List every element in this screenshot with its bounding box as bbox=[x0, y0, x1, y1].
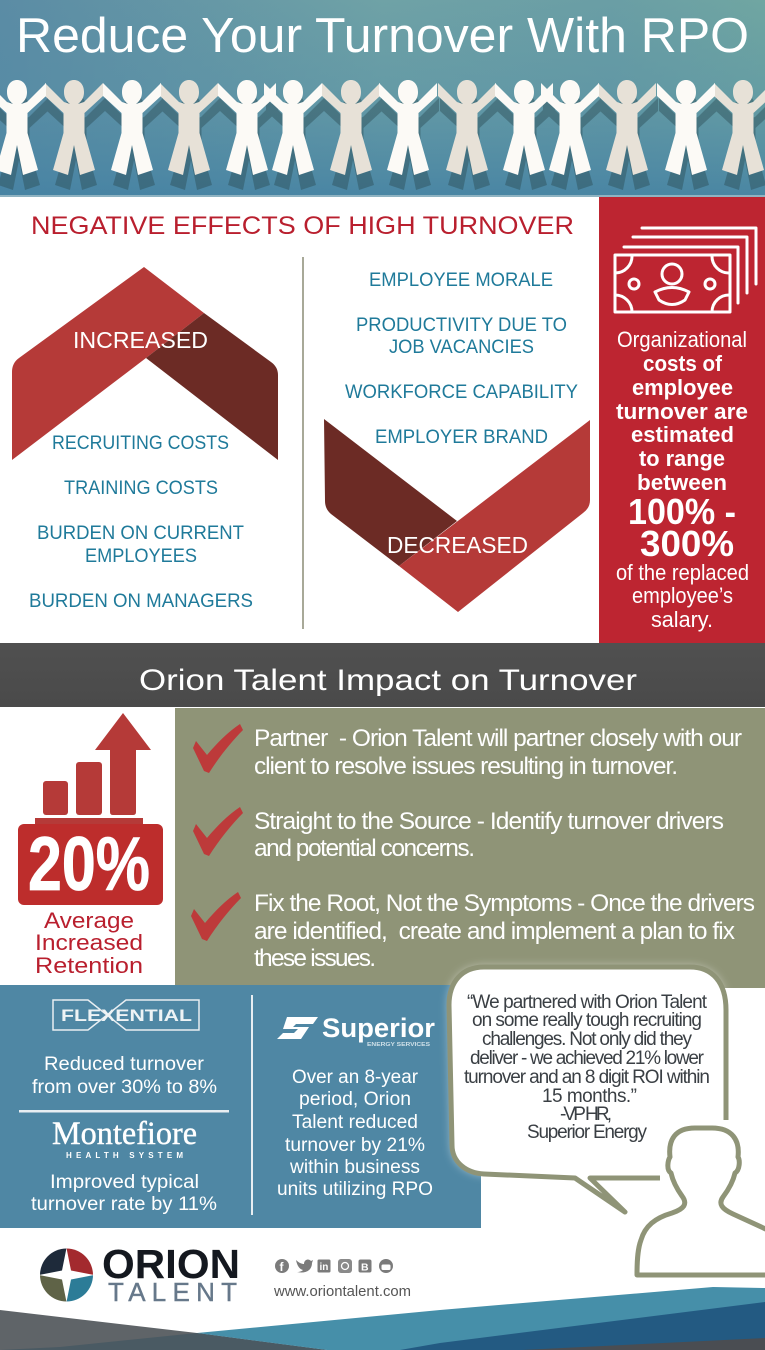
icon: rising bars and arrow bbox=[35, 713, 151, 826]
section heading: Orion Talent Impact on Turnover bbox=[139, 664, 637, 697]
result: Flexential bbox=[32, 1054, 217, 1098]
point 3: are identified, create and implement a plan to fix bbox=[254, 918, 735, 945]
cost text: employee’s bbox=[632, 583, 733, 608]
logo: Orion Talent: TALENT bbox=[108, 1277, 237, 1307]
point 2: Straight to the Source - Identify turnover drivers bbox=[254, 808, 724, 835]
quote text: turnover and an 8 digit ROI within bbox=[464, 1067, 710, 1088]
logo: Orion Talent: ORION bbox=[102, 1241, 240, 1287]
paper people chain bbox=[0, 80, 765, 190]
social icons bbox=[275, 1259, 393, 1274]
icon: check 1 bbox=[193, 724, 243, 773]
testimonial speech bubble bbox=[449, 967, 726, 1212]
stat caption: Increased bbox=[35, 930, 143, 955]
logo: Superior: Superior bbox=[322, 1013, 435, 1043]
logo: Superior bbox=[277, 1013, 435, 1048]
stat caption: Retention bbox=[35, 953, 143, 978]
panel: cost of turnover bbox=[599, 197, 765, 643]
stat box bbox=[18, 824, 163, 905]
heading: negative effects: NEGATIVE EFFECTS OF HIGH TURNOVER bbox=[31, 212, 574, 240]
quote text: deliver - we achieved 21% lower bbox=[470, 1048, 705, 1069]
result: Superior: Talent reduced bbox=[292, 1112, 418, 1133]
social icons: in bbox=[320, 1262, 328, 1273]
result: Superior: units utilizing RPO bbox=[277, 1179, 433, 1200]
stat caption bbox=[35, 908, 143, 978]
result: Superior bbox=[277, 1067, 433, 1200]
increased label: INCREASED bbox=[73, 327, 208, 353]
cost text: between bbox=[637, 470, 727, 495]
decreased list: EMPLOYER BRAND bbox=[375, 427, 548, 448]
increased list: EMPLOYEES bbox=[85, 546, 197, 567]
result: Montefiore: Improved typical bbox=[50, 1172, 199, 1193]
cost text: of the replaced bbox=[616, 560, 749, 585]
social icons: f bbox=[280, 1260, 284, 1274]
result: Flexential: from over 30% to 8% bbox=[32, 1077, 217, 1098]
decreased list bbox=[345, 270, 578, 448]
result: Montefiore: turnover rate by 11% bbox=[31, 1194, 217, 1215]
quote text: -VP HR, bbox=[560, 1104, 612, 1125]
quote text: Superior Energy bbox=[527, 1122, 648, 1143]
panel: approach bbox=[175, 708, 765, 988]
decreased list: JOB VACANCIES bbox=[389, 337, 534, 358]
decreased chevron bbox=[324, 419, 590, 612]
stat caption: Average bbox=[44, 908, 134, 933]
website: www.oriontalent.com bbox=[273, 1284, 411, 1300]
increased list: RECRUITING COSTS bbox=[52, 433, 229, 454]
quote text: 15 months.” bbox=[542, 1086, 637, 1107]
cost text: turnover are bbox=[616, 399, 748, 424]
result: Montefiore bbox=[31, 1172, 217, 1215]
cost text: Organizational bbox=[617, 327, 747, 352]
decreased list: EMPLOYEE MORALE bbox=[369, 270, 553, 291]
cost text bbox=[616, 327, 749, 632]
stat number: 20% bbox=[28, 822, 150, 907]
result: Superior: within business bbox=[289, 1157, 420, 1178]
social icons: B bbox=[361, 1262, 369, 1274]
logo: Flexential: FLEXENTIAL bbox=[61, 1006, 192, 1025]
point 3: Fix the Root, Not the Symptoms - Once the drivers bbox=[254, 890, 755, 917]
result: Superior: Over an 8-year bbox=[292, 1067, 419, 1088]
quote text: “We partnered with Orion Talent bbox=[467, 992, 708, 1013]
icon: check 3 bbox=[191, 892, 241, 941]
logo: Montefiore: HEALTH SYSTEM bbox=[66, 1151, 183, 1160]
section band: Orion Talent impact bbox=[0, 643, 765, 707]
cost text: estimated bbox=[631, 422, 734, 447]
point 2: and potential concerns. bbox=[254, 835, 475, 862]
logo mark bbox=[39, 1248, 94, 1302]
cost text: 300% bbox=[640, 523, 734, 564]
decreased list: PRODUCTIVITY DUE TO bbox=[356, 315, 567, 336]
logo: Orion Talent bbox=[39, 1241, 240, 1307]
increased list bbox=[29, 433, 253, 612]
result: Superior: turnover by 21% bbox=[285, 1135, 425, 1156]
decreased label: DECREASED bbox=[387, 532, 528, 558]
title: Reduce Your Turnover With RPO bbox=[16, 9, 749, 63]
increased list: BURDEN ON MANAGERS bbox=[29, 591, 253, 612]
quote text: on some really tough recruiting bbox=[472, 1010, 702, 1031]
point 3 bbox=[254, 890, 755, 972]
quote text bbox=[464, 992, 710, 1143]
cost text: 100% - bbox=[628, 491, 736, 532]
result: Flexential: Reduced turnover bbox=[44, 1054, 205, 1075]
cost text: to range bbox=[639, 446, 725, 471]
point 1: client to resolve issues resulting in turnover. bbox=[254, 753, 678, 780]
quote text: challenges. Not only did they bbox=[482, 1029, 692, 1050]
decreased list: WORKFORCE CAPABILITY bbox=[345, 382, 578, 403]
cost text: costs of bbox=[643, 351, 723, 376]
point 1: Partner - Orion Talent will partner closely with our bbox=[254, 725, 742, 752]
icon: money stack bbox=[615, 228, 756, 312]
increased list: TRAINING COSTS bbox=[64, 478, 218, 499]
icon: person outline bbox=[637, 1128, 765, 1275]
cost text: employee bbox=[632, 375, 733, 400]
icon: check 2 bbox=[193, 807, 243, 856]
logo: Montefiore: Montefiore bbox=[52, 1116, 197, 1152]
panel: client results bbox=[0, 985, 481, 1228]
cost text: salary. bbox=[651, 607, 713, 632]
retention stat bbox=[18, 713, 163, 978]
header banner bbox=[0, 0, 765, 197]
point 3: these issues. bbox=[254, 945, 376, 972]
logo: Flexential bbox=[53, 1000, 199, 1030]
increased chevron bbox=[12, 267, 278, 460]
point 2 bbox=[254, 808, 724, 862]
logo: Superior: ENERGY SERVICES bbox=[367, 1042, 430, 1048]
point 1 bbox=[254, 725, 742, 780]
bottom angled shapes bbox=[0, 1287, 765, 1350]
result: Superior: period, Orion bbox=[299, 1089, 411, 1110]
increased list: BURDEN ON CURRENT bbox=[37, 523, 244, 544]
